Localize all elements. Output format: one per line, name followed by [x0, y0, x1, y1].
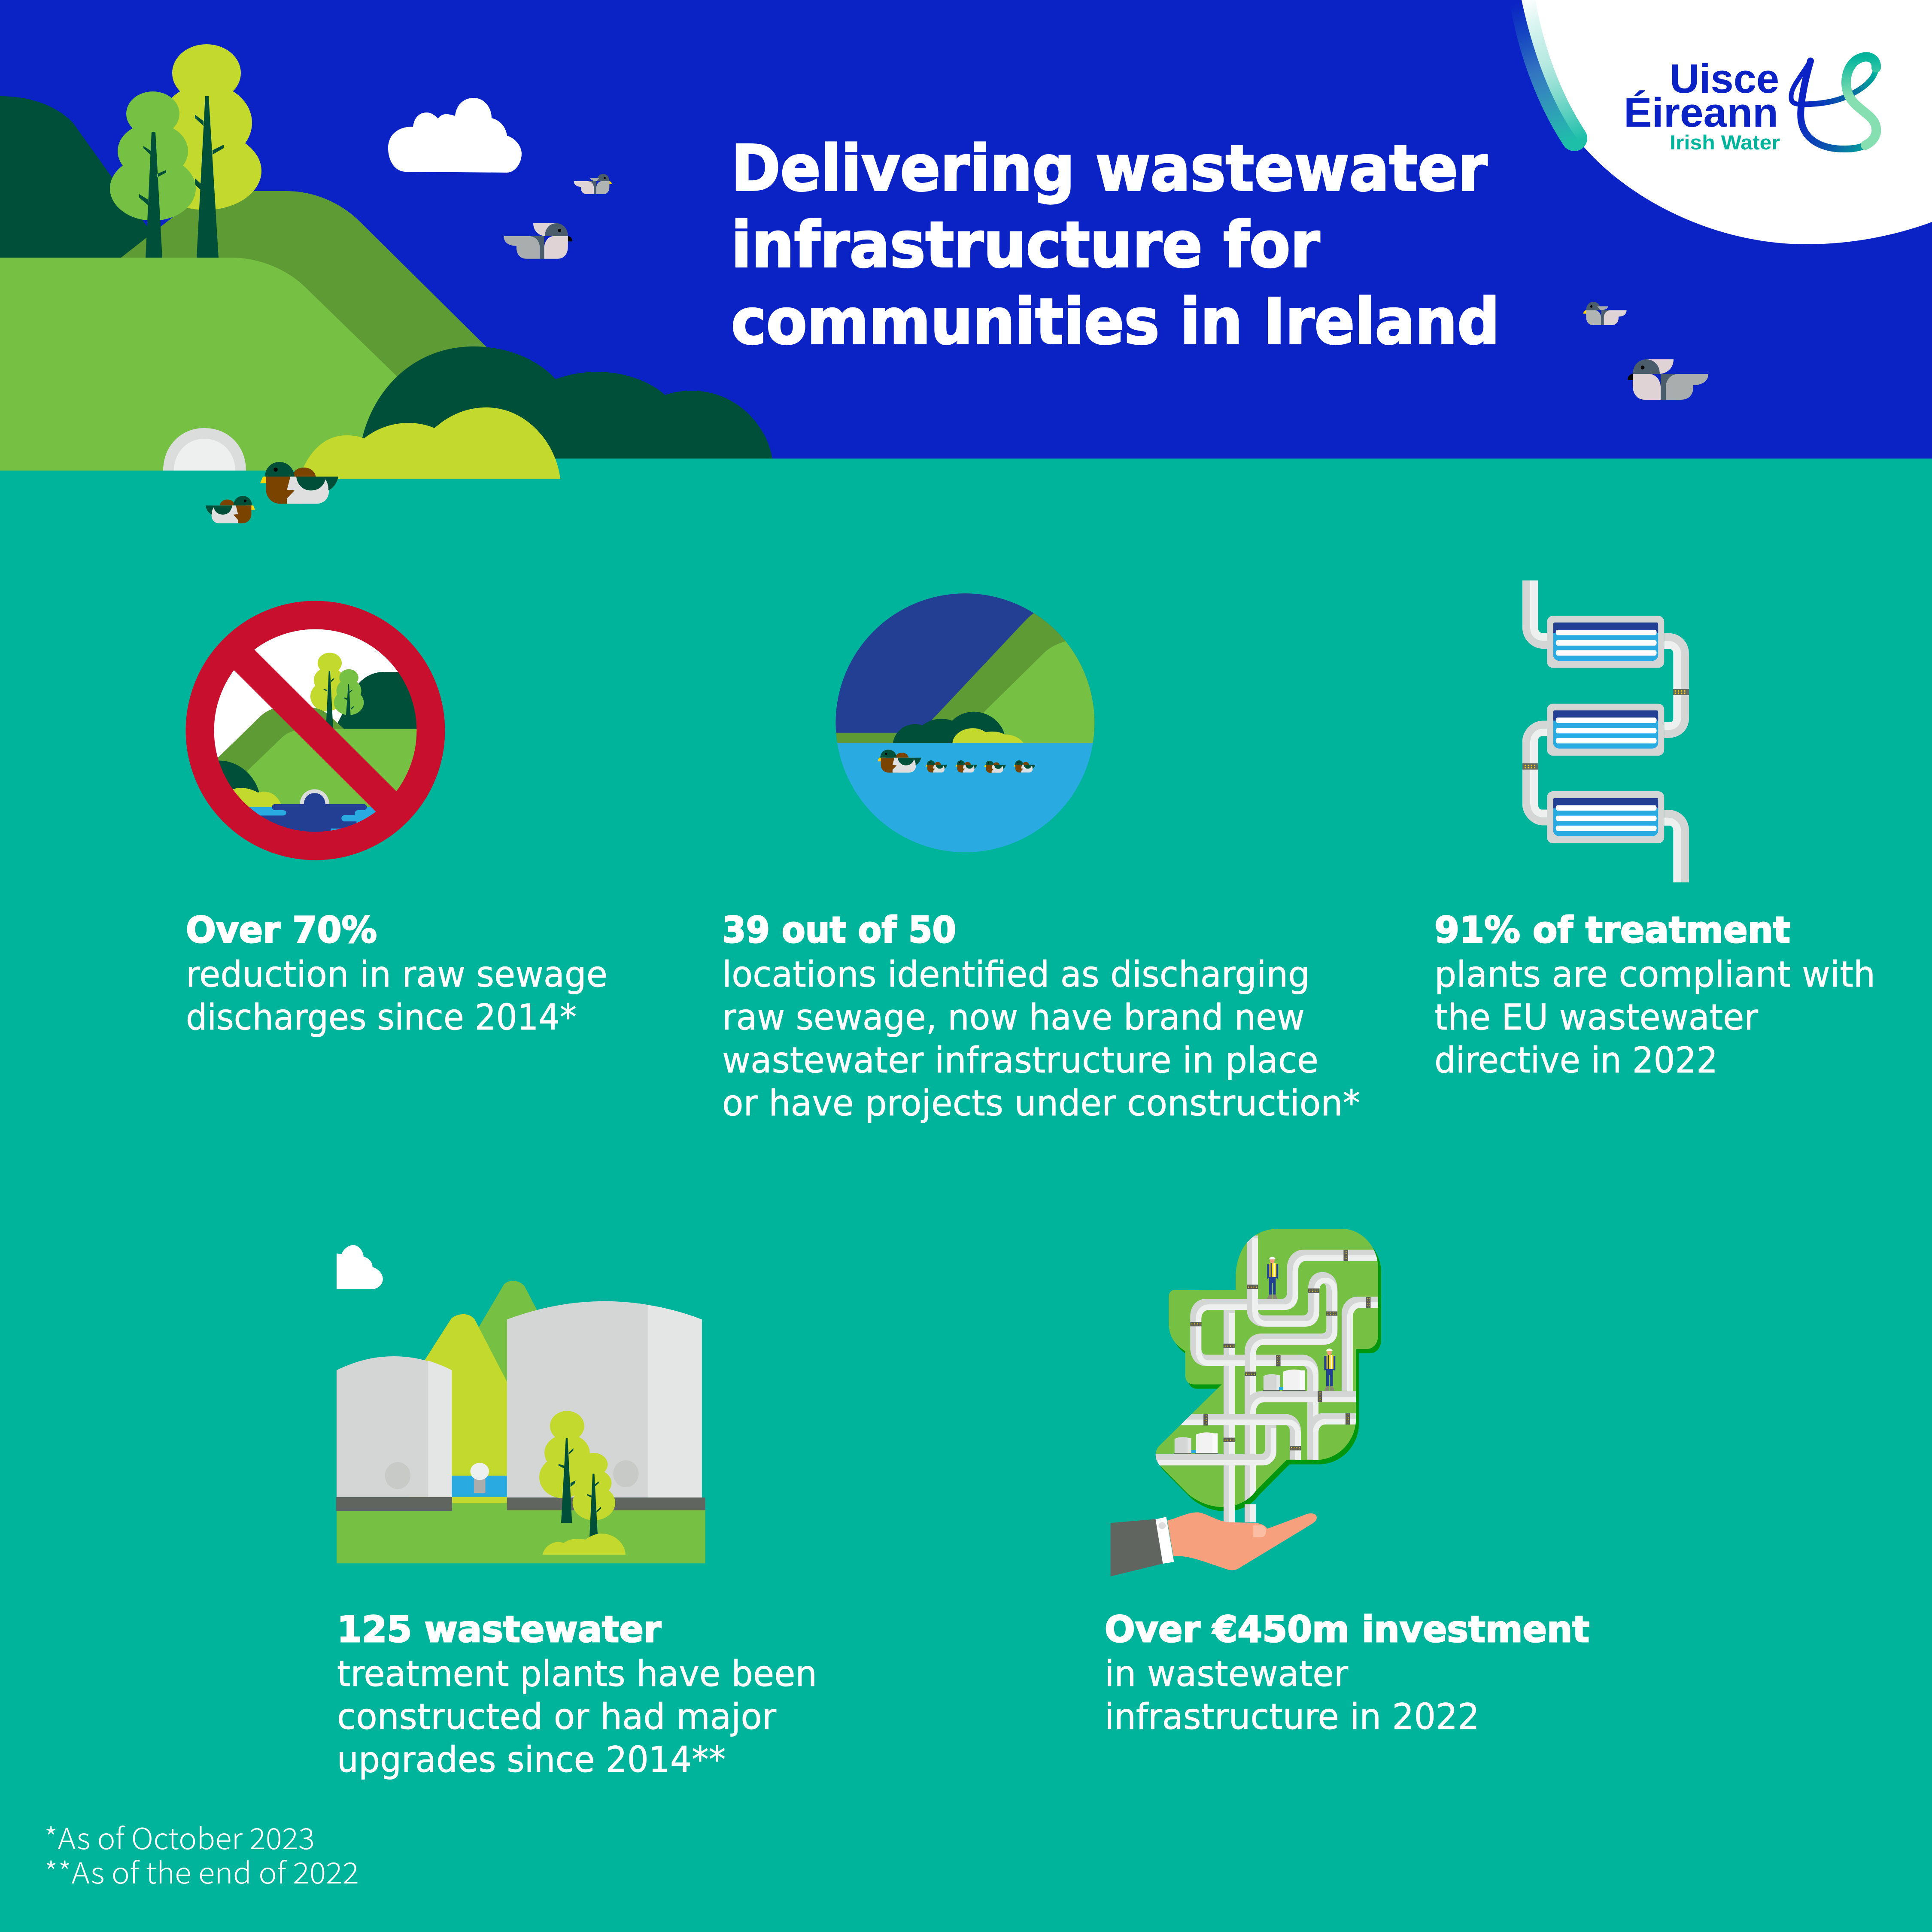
outfall pipe — [163, 428, 246, 471]
stat icon: treatment plant — [336, 1245, 705, 1563]
stat: 39 out of 50 — [722, 909, 1360, 1124]
stat: 125 wastewater: treatment plants have been — [337, 1653, 817, 1695]
stat: 125 wastewater: constructed or had major — [337, 1696, 777, 1738]
pipes — [1522, 580, 1689, 882]
worker 2 — [1324, 1349, 1335, 1391]
title: communities in Ireland — [731, 285, 1500, 358]
stat: 39 out of 50: wastewater infrastructure in place — [722, 1039, 1318, 1081]
mountains — [408, 1281, 556, 1503]
flanges — [1522, 689, 1689, 770]
logo wordmark — [1624, 56, 1780, 154]
large duck — [260, 462, 338, 504]
tank 1 — [1547, 616, 1664, 668]
hand — [1111, 1512, 1317, 1577]
mid green hill — [121, 191, 558, 459]
stat: over 450m investment — [1105, 1608, 1589, 1738]
right tank — [507, 1301, 705, 1510]
bird: small right — [1583, 302, 1627, 325]
stat: over 70%: discharges since 2014* — [186, 996, 577, 1038]
stat: 39 out of 50: or have projects under construction* — [722, 1082, 1360, 1124]
ground — [337, 1503, 705, 1563]
logo badge — [1522, 0, 1932, 244]
small trees — [310, 653, 364, 715]
stat icon: treatment tanks and pipes — [1522, 580, 1689, 882]
cloud — [337, 1245, 383, 1289]
dark hill — [0, 96, 185, 279]
stat: over 70%: reduction in raw sewage — [186, 954, 608, 995]
footnotes: *As of October 2023 — [44, 1815, 315, 1858]
pipe network — [1155, 1236, 1381, 1525]
logo wordmark: Irish Water — [1670, 131, 1780, 154]
stat: over 70%: Over 70% — [186, 909, 377, 951]
stat: over 450m investment: in wastewater — [1105, 1653, 1349, 1695]
green tree — [110, 91, 196, 258]
stat: 91% of treatment: plants are compliant with — [1434, 954, 1875, 995]
stat icon: no raw sewage sign — [200, 615, 431, 846]
cloud — [388, 98, 522, 173]
dark bushes — [361, 346, 772, 468]
logo symbol — [1791, 57, 1876, 149]
bird: large right — [1628, 359, 1708, 400]
map of Ireland — [1156, 1229, 1378, 1507]
stat: 39 out of 50: raw sewage, now have brand new — [722, 996, 1305, 1038]
sky — [0, 0, 1932, 459]
bush — [542, 1534, 626, 1555]
yellow bush — [299, 407, 560, 479]
swoosh — [1522, 0, 1574, 138]
footnotes — [44, 1815, 359, 1892]
header landscape — [0, 44, 772, 523]
stat: 91% of treatment: 91% of treatment — [1434, 909, 1790, 951]
stat: 125 wastewater: upgrades since 2014** — [337, 1739, 726, 1780]
worker 1 — [1267, 1257, 1278, 1299]
logo wordmark: Uisce — [1670, 56, 1779, 102]
left tank — [336, 1356, 452, 1511]
map shadow — [1159, 1233, 1381, 1511]
title: Delivering wastewater — [731, 132, 1487, 205]
stat: 91% of treatment — [1434, 909, 1875, 1081]
stat: 125 wastewater — [337, 1608, 817, 1780]
duck row — [878, 750, 1035, 773]
light green hill — [0, 258, 498, 471]
stat: 91% of treatment: the EU wastewater — [1434, 996, 1759, 1038]
stat icon: hand holding Ireland map with pipes — [1111, 1229, 1381, 1577]
pond and outlet — [452, 1463, 507, 1497]
title — [731, 132, 1500, 358]
bird: small left — [574, 174, 612, 194]
title: infrastructure for — [731, 208, 1320, 282]
tank 2 — [1547, 704, 1664, 756]
pipe flanges — [1190, 1250, 1370, 1450]
footnotes: **As of the end of 2022 — [44, 1850, 359, 1892]
stat: 39 out of 50: locations identified as discharging — [722, 954, 1310, 995]
stat: over 450m investment: infrastructure in 2022 — [1105, 1696, 1479, 1738]
small tanks — [1174, 1370, 1306, 1454]
logo wordmark: Éireann — [1624, 90, 1778, 136]
yellow tree — [150, 44, 261, 258]
stat icon: ducks on clean lake — [835, 593, 1095, 854]
tank 3 — [1547, 791, 1664, 843]
stat: over 450m investment: Over €450m investment — [1105, 1608, 1589, 1650]
small duck — [206, 496, 255, 523]
stat: over 70% — [186, 909, 608, 1038]
bird: large left — [504, 223, 572, 259]
stat: 39 out of 50: 39 out of 50 — [722, 909, 956, 951]
trees — [539, 1411, 615, 1538]
stat: 91% of treatment: directive in 2022 — [1434, 1039, 1718, 1081]
stat: 125 wastewater: 125 wastewater — [337, 1608, 662, 1650]
